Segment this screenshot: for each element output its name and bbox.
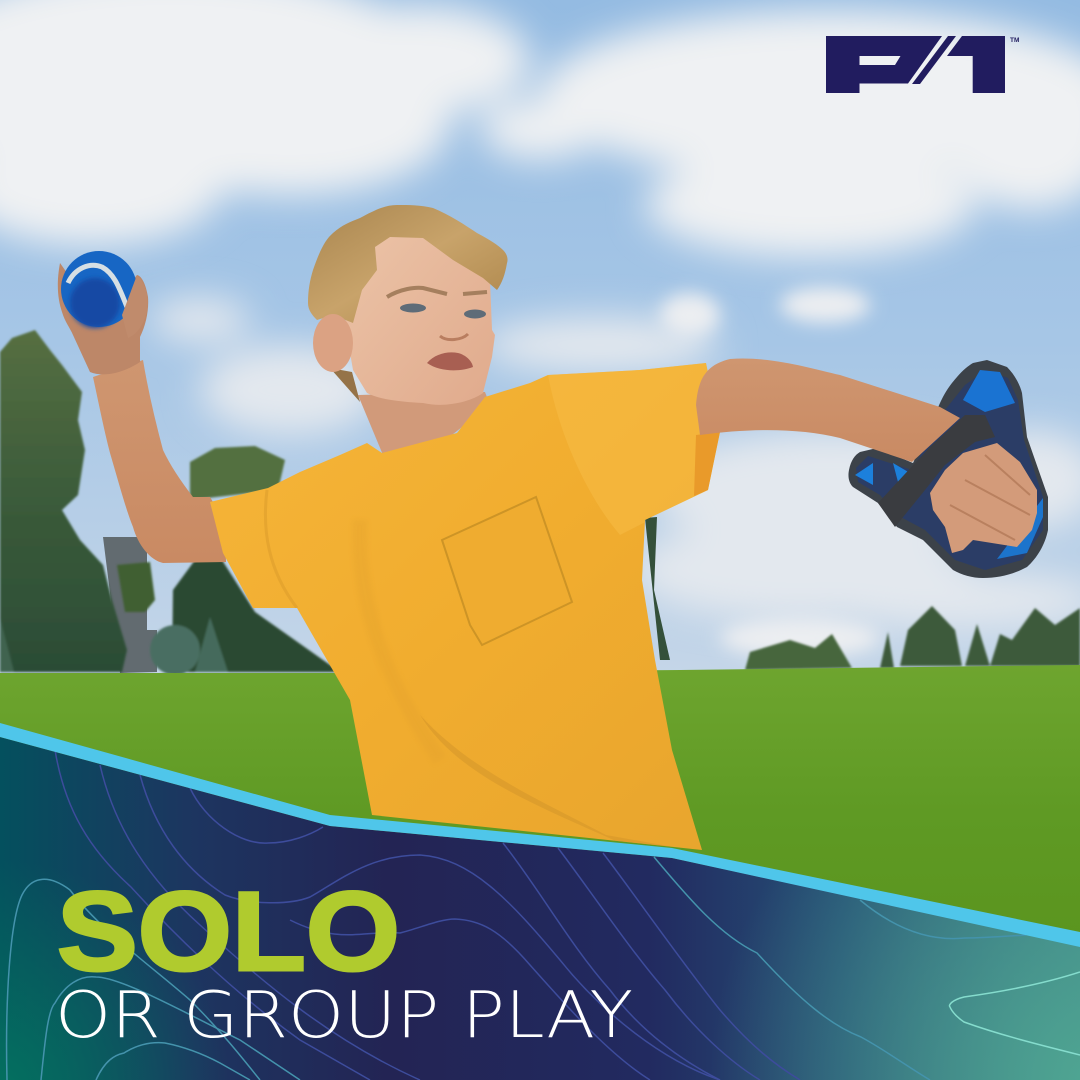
pad blue inserts bbox=[963, 370, 1015, 412]
sky background bbox=[0, 0, 1080, 680]
left tree line bbox=[0, 330, 340, 675]
cyan band bbox=[0, 723, 1080, 947]
eyes and brows bbox=[387, 288, 447, 297]
bottom gradient panel bbox=[0, 723, 1080, 1080]
hair behind ear bbox=[330, 368, 360, 402]
catch pad bbox=[848, 360, 1048, 578]
head bbox=[308, 205, 508, 405]
right tree line bbox=[745, 606, 1080, 670]
logo bbox=[826, 36, 1019, 93]
ball bbox=[61, 251, 148, 338]
trees and building on the horizon bbox=[0, 330, 1080, 675]
subheading: OR GROUP PLAY bbox=[55, 979, 633, 1053]
hand bbox=[930, 443, 1037, 553]
neck bbox=[358, 392, 490, 460]
mouth bbox=[427, 352, 473, 370]
heading bbox=[55, 869, 633, 1053]
nose bbox=[440, 334, 468, 340]
hair bbox=[308, 205, 508, 323]
wrist strap bbox=[878, 415, 995, 527]
building bbox=[103, 537, 157, 673]
shirt pocket bbox=[442, 497, 572, 645]
boy bbox=[58, 205, 1048, 852]
contour lines bbox=[7, 750, 1080, 1080]
grass field bbox=[0, 665, 1080, 960]
shirt bbox=[210, 363, 720, 852]
ear bbox=[313, 314, 353, 372]
extended arm bbox=[696, 359, 960, 462]
face bbox=[345, 225, 495, 405]
throwing arm bbox=[93, 360, 226, 563]
throwing hand bbox=[58, 263, 148, 374]
logo: TM bbox=[1010, 37, 1019, 44]
clouds bbox=[0, 0, 1080, 658]
solo: SOLO bbox=[57, 869, 400, 994]
